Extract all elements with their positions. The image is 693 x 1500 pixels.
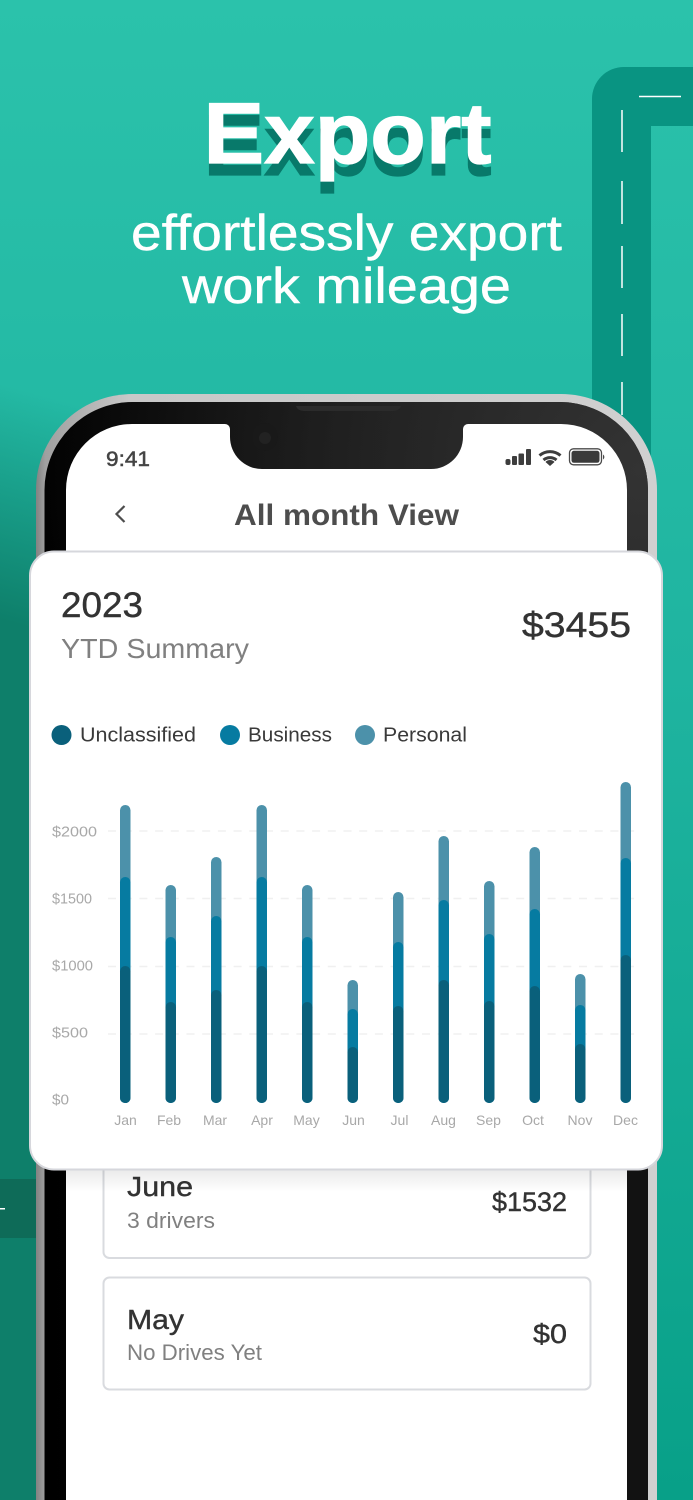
bars: business	[120, 858, 631, 1103]
legend: Business	[248, 724, 332, 746]
year heading: 2023	[61, 586, 143, 625]
card: May: May	[127, 1304, 184, 1335]
month labels: Jan	[114, 1112, 137, 1128]
icon: back chevron	[116, 506, 124, 522]
legend: Personal	[383, 724, 467, 746]
month labels: Jul	[391, 1112, 408, 1128]
card: June	[104, 1140, 590, 1258]
legend: Unclassified	[80, 724, 196, 746]
icon: wifi	[540, 452, 560, 466]
YTD label: YTD Summary	[61, 633, 249, 664]
month labels: Sep	[476, 1112, 501, 1128]
bars: unclassified	[120, 955, 631, 1103]
subtitle: work mileage	[181, 258, 511, 314]
month labels: Feb	[157, 1112, 181, 1128]
speaker	[296, 406, 401, 411]
title: Export	[204, 86, 492, 182]
bar chart	[52, 782, 640, 1128]
summary card	[30, 552, 662, 1170]
month labels: May	[293, 1112, 320, 1128]
card: June: 3 drivers	[127, 1208, 215, 1233]
road left	[0, 1179, 36, 1238]
y axis labels	[52, 824, 97, 1108]
y axis labels: $1500	[52, 892, 92, 908]
phone bezel	[44, 402, 648, 1500]
card: May	[104, 1278, 590, 1390]
legend	[52, 724, 467, 746]
total: $3455	[522, 606, 631, 645]
card: May: $0	[533, 1319, 567, 1349]
screen title: All month View	[234, 499, 460, 532]
month labels: Nov	[568, 1112, 592, 1128]
icon: signal	[506, 449, 531, 465]
y axis labels: $0	[52, 1092, 69, 1108]
subtitle	[131, 205, 562, 314]
month labels	[114, 1112, 638, 1128]
card: June: June	[127, 1171, 193, 1202]
month labels: Jun	[342, 1112, 365, 1128]
phone screen	[66, 424, 627, 1500]
icon: battery	[570, 449, 604, 465]
bars: personal	[120, 782, 631, 1103]
y axis labels: $500	[52, 1026, 88, 1042]
y axis labels: $1000	[52, 958, 93, 974]
road top right	[592, 67, 693, 500]
title: Export	[204, 98, 492, 194]
camera	[252, 423, 278, 451]
month labels: Apr	[251, 1112, 273, 1128]
month labels: Mar	[203, 1112, 227, 1128]
phone	[36, 394, 657, 1500]
y axis labels: $2000	[52, 824, 97, 840]
month labels: Dec	[613, 1112, 638, 1128]
status time: 9:41	[106, 448, 150, 471]
phone frame	[36, 394, 657, 1500]
subtitle: effortlessly export	[131, 205, 562, 261]
month labels: Aug	[431, 1112, 456, 1128]
card: May: No Drives Yet	[127, 1340, 262, 1365]
month labels: Oct	[522, 1112, 544, 1128]
card: June: $1532	[492, 1187, 567, 1217]
